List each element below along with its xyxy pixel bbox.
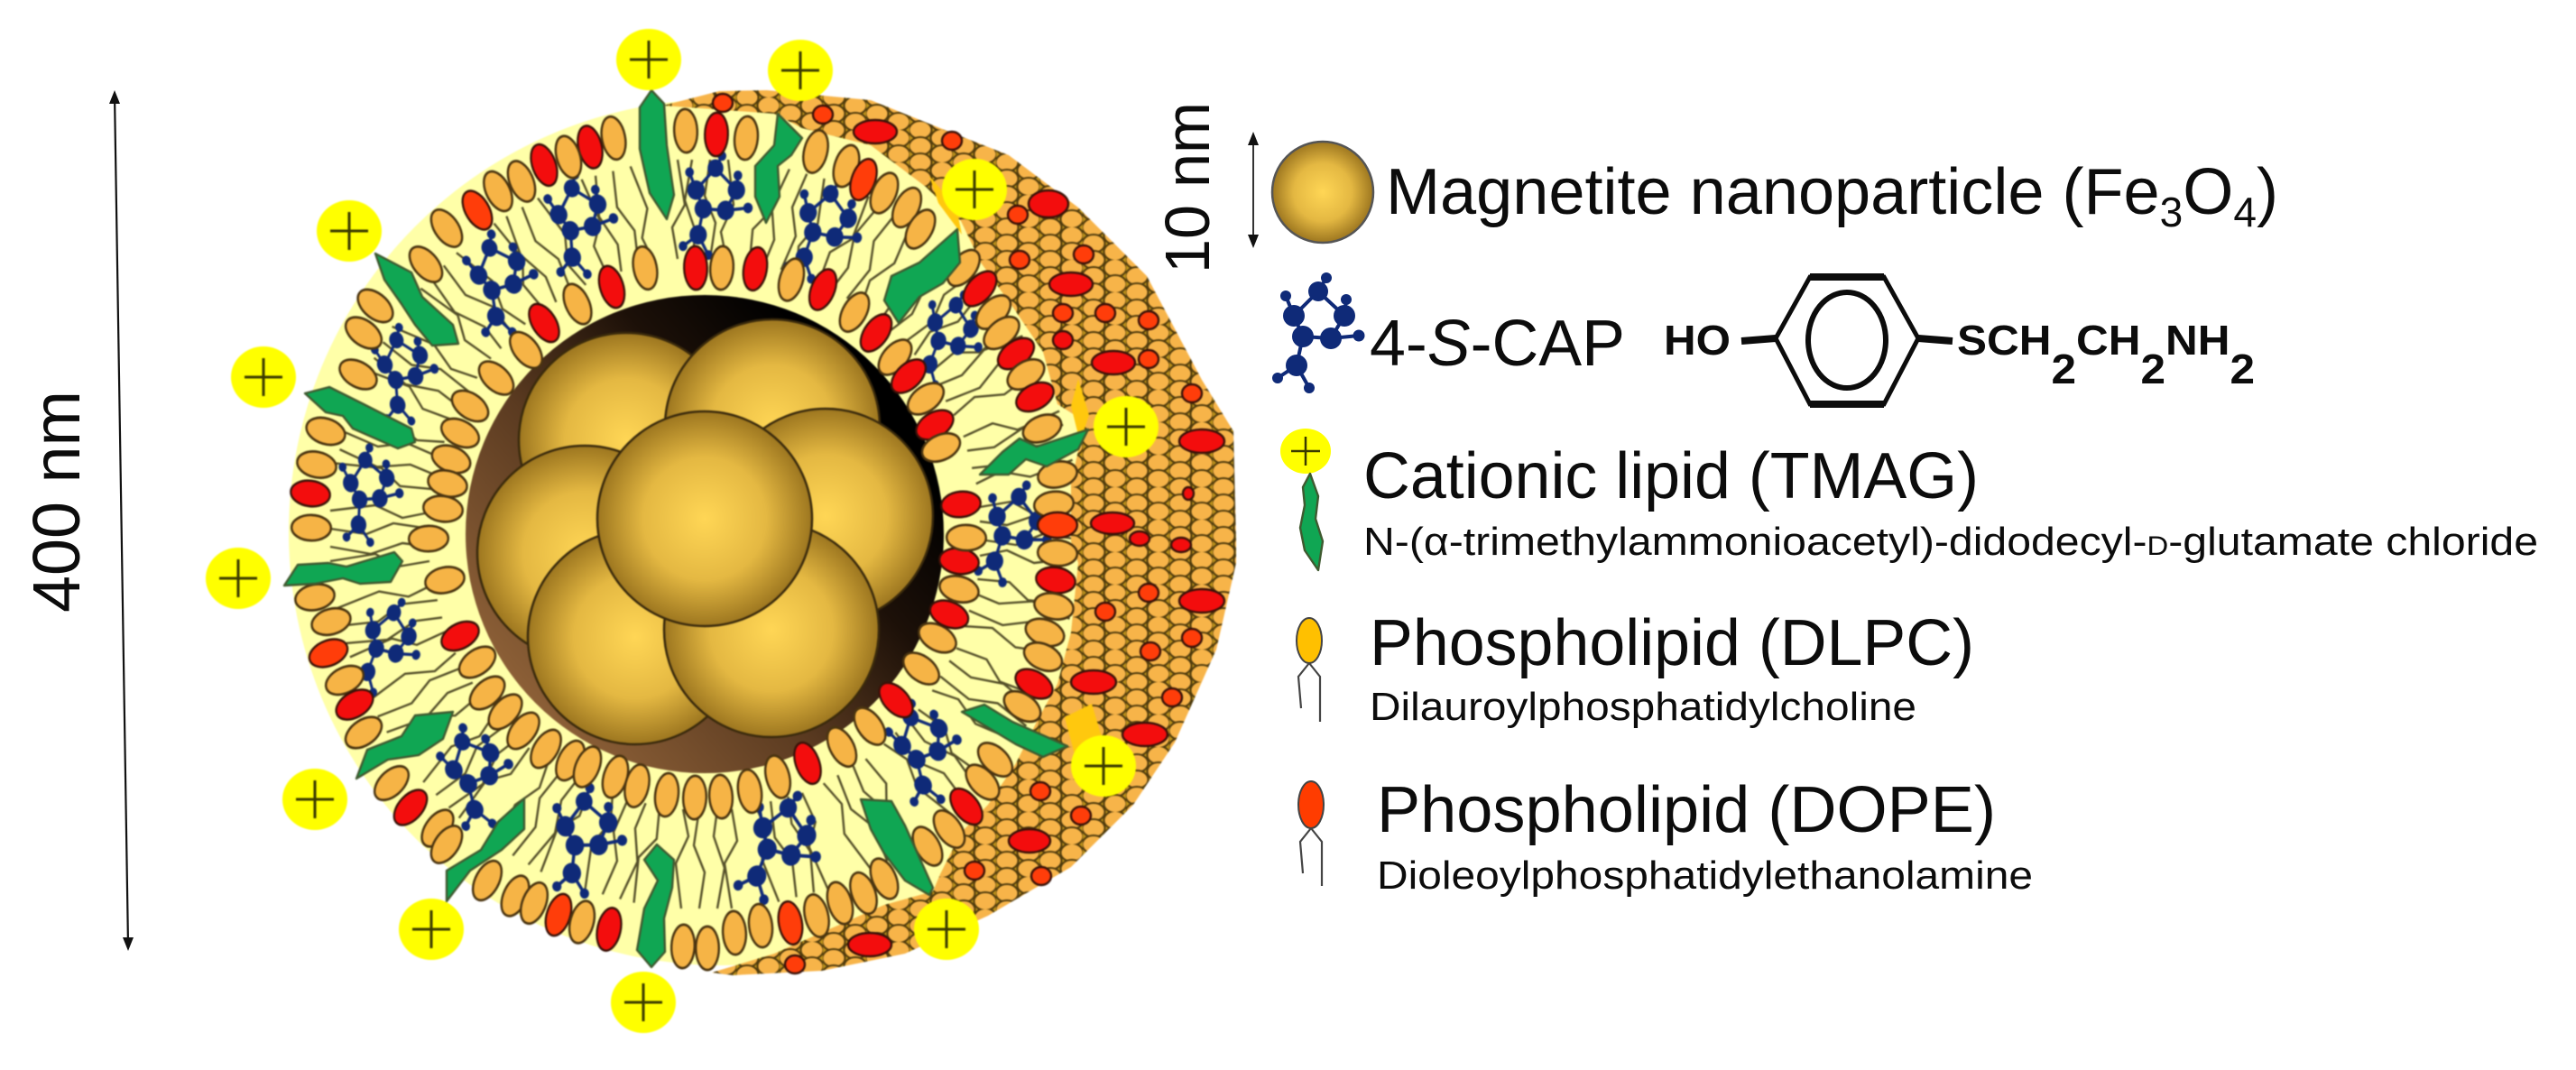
DOPE heads on surface xyxy=(713,94,1224,973)
legend sublabel: DOPE full name: Dioleoylphosphatidylethanolamine xyxy=(1377,853,2033,898)
legend icon: magnetite nanoparticle xyxy=(1272,142,1373,243)
dimension: 400 nm arrow xyxy=(109,90,134,951)
legend label: magnetite nanoparticle: 3 xyxy=(2160,189,2183,235)
legend label: magnetite nanoparticle: ) xyxy=(2257,156,2278,228)
4-S-CAP molecules in membrane xyxy=(330,152,1057,913)
liposome interior base xyxy=(289,99,1155,965)
legend label: 4-S-CAP: 4-S-CAP xyxy=(1370,308,1625,380)
legend label: cationic lipid: Cationic lipid (TMAG) xyxy=(1363,440,1979,512)
chemical structure of 4-S-CAP: CH xyxy=(2076,317,2140,364)
chemical structure of 4-S-CAP: 2 xyxy=(2140,346,2165,392)
magnetite nanoparticle cluster xyxy=(477,319,933,744)
dimension: 10 nm arrow xyxy=(1248,132,1259,248)
legend sublabel: TMAG full name: N-(α-trimethylammonioacetyl)-didodecyl- D-glutamate chloride xyxy=(1363,520,2538,564)
legend icon: DOPE phospholipid xyxy=(1298,781,1324,886)
dimension label: 400 nm: 400 nm xyxy=(19,391,94,613)
chemical structure of 4-S-CAP: HO xyxy=(1664,317,1731,364)
cationic head groups (+) xyxy=(206,29,1159,1033)
dimension label: 10 nm: 10 nm xyxy=(1152,102,1223,273)
lipid bilayer surface in crescent xyxy=(663,90,1236,975)
cationic lipid tails (TMAG) xyxy=(284,90,1088,967)
chemical structure of 4-S-CAP: 2 xyxy=(2230,346,2255,392)
liposome diagram xyxy=(206,29,1236,1033)
chemical structure of 4-S-CAP: NH xyxy=(2165,317,2230,364)
chemical structure of 4-S-CAP xyxy=(1664,277,2255,404)
legend label: DLPC: Phospholipid (DLPC) xyxy=(1370,607,1974,679)
legend icon: 4-S-CAP molecule xyxy=(1272,272,1364,393)
legend label: DOPE: Phospholipid (DOPE) xyxy=(1377,774,1996,846)
legend label: magnetite nanoparticle: Magnetite nanoparticle (Fe xyxy=(1386,156,2158,228)
legend label: magnetite nanoparticle: 4 xyxy=(2233,189,2257,235)
lipid tails xyxy=(330,160,1079,909)
chemical structure of 4-S-CAP: 2 xyxy=(2051,346,2076,392)
magnetite core shell xyxy=(466,295,944,773)
legend label: magnetite nanoparticle: O xyxy=(2183,156,2233,228)
outer membrane phospholipid heads xyxy=(290,108,1079,970)
legend icon: cationic lipid xyxy=(1280,429,1331,570)
legend icon: DLPC phospholipid xyxy=(1297,618,1322,722)
inner membrane phospholipid heads xyxy=(409,244,986,820)
chemical structure of 4-S-CAP: SCH xyxy=(1957,317,2045,364)
legend sublabel: DLPC full name: Dilauroylphosphatidylcholine xyxy=(1370,685,1916,729)
